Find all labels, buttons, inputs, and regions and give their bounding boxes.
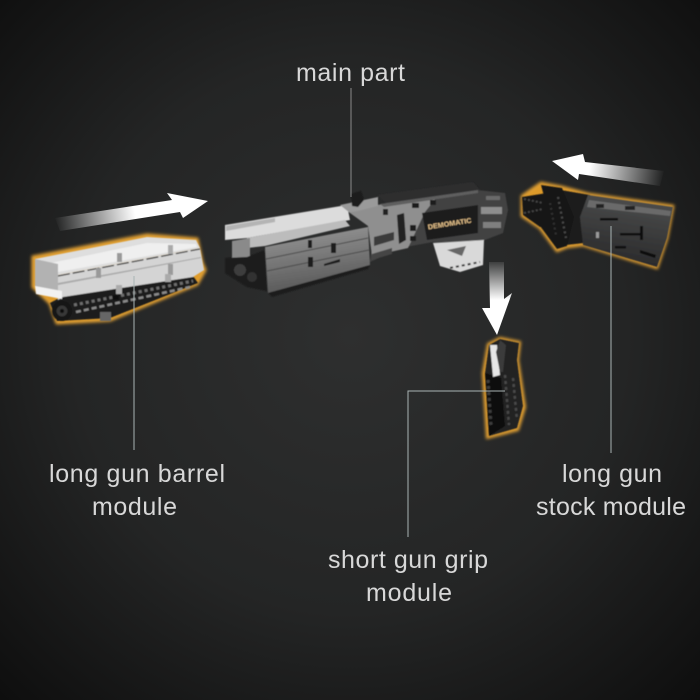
label: main part: main part — [296, 59, 405, 87]
leader line: main part — [350, 88, 352, 197]
arrow: barrel moves right — [55, 193, 208, 231]
leader line: barrel — [133, 276, 135, 450]
label: long gun barrel module — [49, 460, 225, 521]
panel: long gun stock module — [522, 183, 673, 268]
mid light section — [350, 198, 436, 256]
label: long gun stock module: stock module — [536, 493, 686, 521]
rear dark body — [370, 190, 508, 262]
grey barrel panel — [265, 227, 370, 293]
white top of barrel — [225, 205, 350, 240]
label: short gun grip module — [328, 546, 488, 607]
label: long gun stock module: long gun — [562, 460, 662, 488]
panel: long gun barrel module — [33, 235, 205, 323]
arrow: grip moves down — [482, 262, 512, 335]
label: long gun barrel module: module — [92, 493, 177, 521]
label: long gun stock module — [536, 460, 686, 521]
label: short gun grip module: short gun grip — [328, 546, 488, 574]
leader line: stock — [610, 226, 612, 453]
label: short gun grip module: module — [366, 579, 452, 607]
grip stub — [433, 240, 484, 272]
panel: main part — [225, 182, 508, 297]
dark front end — [225, 250, 267, 291]
logo plate — [422, 205, 478, 240]
label: long gun barrel module: long gun barrel — [49, 460, 225, 488]
panel: short gun grip module — [483, 338, 525, 438]
logo: DEMOMATIC — [427, 218, 472, 231]
top clamp — [351, 191, 364, 207]
mechanical holes — [412, 203, 419, 208]
arrow: stock moves left — [552, 154, 664, 186]
top plate — [377, 182, 480, 204]
leader line: grip — [408, 391, 505, 537]
